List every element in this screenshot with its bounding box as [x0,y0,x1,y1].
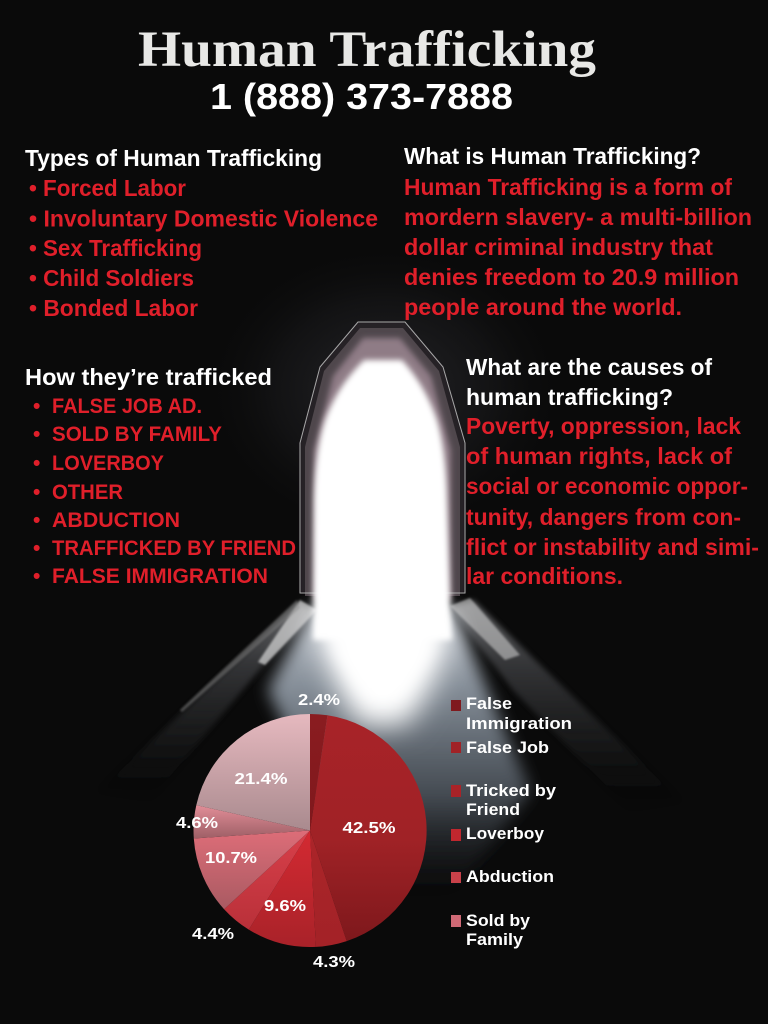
panel: types of human trafficking: Types of Human Trafficking [25,145,322,171]
panel: what is human trafficking: people around the world. [404,294,682,320]
panel: how they're trafficked: TRAFFICKED BY FRIEND [52,537,296,560]
panel: how they're trafficked: • [33,423,40,446]
chart legend: Friend [466,801,520,819]
panel: what is human trafficking: denies freedom to 20.9 million [404,264,739,290]
panel: how they're trafficked: • [33,537,40,560]
pie chart: 10.7% [205,850,257,867]
panel: causes: lar conditions. [466,563,623,589]
chart legend: False Job [466,739,549,757]
panel: causes [466,354,759,589]
panel: what is human trafficking: What is Human Trafficking? [404,143,701,169]
panel: how they're trafficked: FALSE IMMIGRATION [52,565,268,588]
pie chart: 21.4% [234,771,288,788]
panel: causes: tunity, dangers from con- [466,504,741,530]
chart legend: Loverboy [466,825,545,843]
panel: how they're trafficked: OTHER [52,481,123,504]
title: Human Trafficking [138,22,596,78]
pie chart: 4.3% [313,954,355,971]
panel: how they're trafficked [25,364,296,588]
panel: how they're trafficked: • [33,509,40,532]
panel: how they're trafficked: FALSE JOB AD. [52,395,202,418]
chart legend: Sold by [466,912,531,930]
chart legend: Family [466,931,524,949]
panel: what is human trafficking: Human Trafficking is a form of [404,174,732,200]
panel: how they're trafficked: • [33,395,40,418]
panel: how they're trafficked: • [33,452,40,475]
panel: how they're trafficked: ABDUCTION [52,509,180,532]
pie chart: 4.4% [192,926,234,943]
panel: types of human trafficking: • Involuntary Domestic Violence [29,206,378,232]
panel: types of human trafficking: • Bonded Labor [29,295,198,321]
chart legend: Tricked by [466,782,557,800]
panel: causes: flict or instability and simi- [466,534,759,560]
panel: causes: What are the causes of [466,354,712,380]
panel: what is human trafficking [404,143,752,320]
tunnel illustration [100,240,680,900]
panel: what is human trafficking: dollar criminal industry that [404,234,713,260]
phone number: 1 (888) 373-7888 [210,76,513,117]
panel: how they're trafficked: LOVERBOY [52,452,164,475]
pie chart: 2.4% [298,692,340,709]
panel: types of human trafficking: • Forced Labor [29,175,186,201]
panel: causes: social or economic oppor- [466,473,748,499]
chart legend: Immigration [466,715,572,733]
panel: types of human trafficking [25,145,378,321]
chart legend [451,695,572,949]
panel: causes: of human rights, lack of [466,443,732,469]
panel: how they're trafficked: How they’re trafficked [25,364,272,390]
chart legend: Abduction [466,868,554,886]
panel: types of human trafficking: • Child Soldiers [29,265,194,291]
panel: how they're trafficked: • [33,481,40,504]
pie chart: 4.6% [176,815,218,832]
pie chart: 42.5% [342,820,396,837]
panel: what is human trafficking: mordern slavery- a multi-billion [404,204,752,230]
panel: how they're trafficked: • [33,565,40,588]
panel: causes: Poverty, oppression, lack [466,413,741,439]
chart legend: False [466,695,512,713]
panel: causes: human trafficking? [466,384,673,410]
panel: types of human trafficking: • Sex Trafficking [29,235,202,261]
pie chart [176,692,427,971]
panel: how they're trafficked: SOLD BY FAMILY [52,423,222,446]
pie chart: 9.6% [264,898,306,915]
